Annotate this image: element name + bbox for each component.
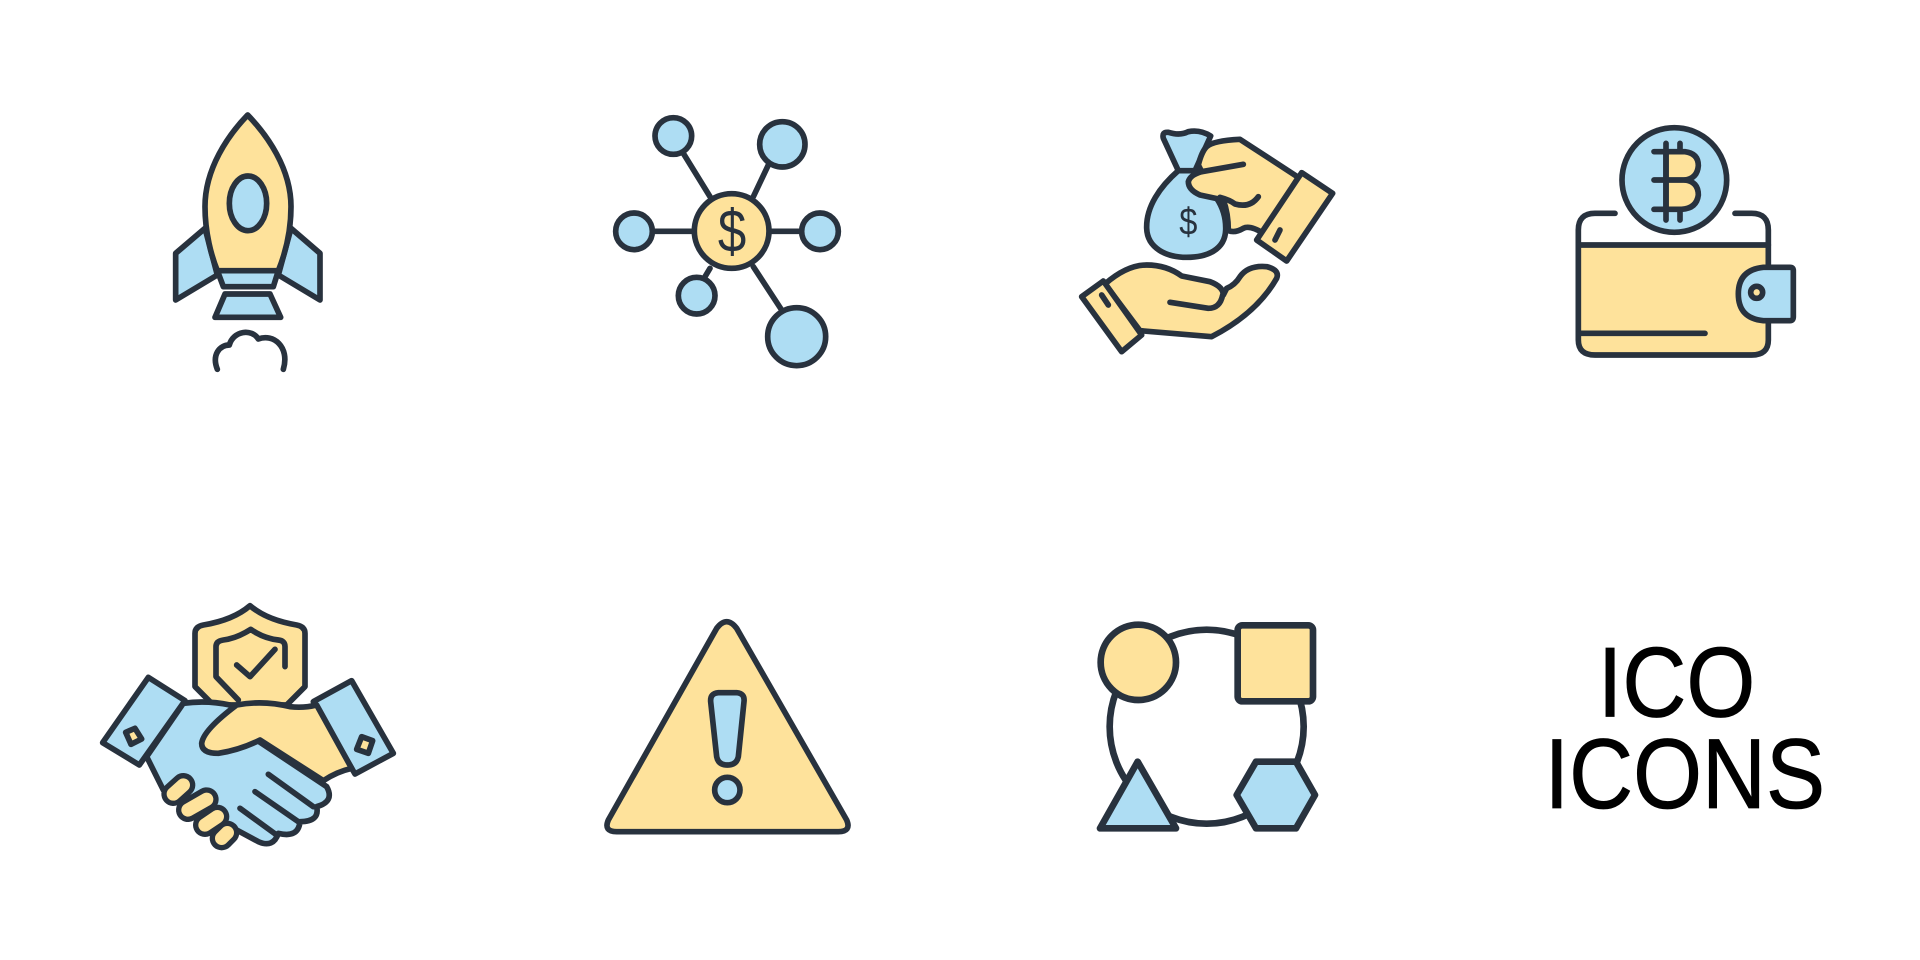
icon: token network: $ <box>718 197 746 264</box>
icon: hands exchanging money bag: $ <box>1179 200 1198 243</box>
icon: token network <box>616 118 838 366</box>
icon: connected shapes <box>1100 625 1315 828</box>
icon: secure handshake with shield <box>103 606 393 844</box>
title: ICO ICONS: ICONS <box>1544 718 1825 829</box>
title: ICO ICONS: ICO <box>1598 627 1755 738</box>
icon: warning triangle <box>607 622 848 832</box>
icon: bitcoin wallet <box>1578 128 1793 355</box>
icon: rocket <box>176 115 320 369</box>
icon: hands exchanging money bag <box>1082 131 1333 352</box>
title: ICO ICONS <box>1544 627 1825 829</box>
